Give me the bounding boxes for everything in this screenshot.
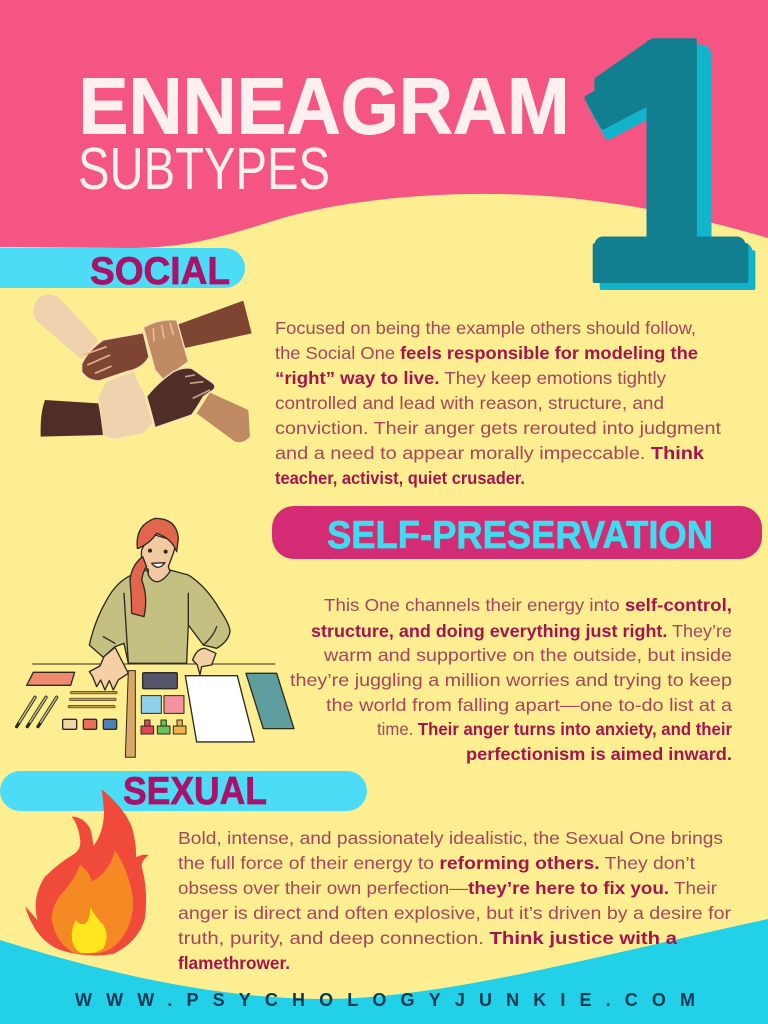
text block: social: “right” way to live. They keep emotions tightly — [275, 368, 666, 388]
cyan footer wave — [0, 919, 768, 1024]
text block: social: the Social One feels responsible for modeling the — [275, 343, 698, 363]
table edge — [33, 662, 275, 665]
text block: social — [275, 318, 721, 488]
pink header wave — [0, 0, 768, 248]
big number one — [574, 0, 763, 362]
dark block — [143, 673, 177, 689]
text block: self-preservation: warm and supportive on the outside, but inside — [323, 645, 732, 665]
text block: social: controlled and lead with reason, structure, and — [275, 393, 664, 413]
text block: sexual: anger is direct and often explosive, but it’s driven by a desire for — [178, 903, 731, 923]
text block: self-preservation: they’re juggling a million worries and trying to keep — [290, 670, 732, 690]
heading: sexual: SEXUAL — [123, 770, 267, 813]
text block: self-preservation: This One channels their energy into self-control, — [324, 595, 732, 615]
footer url: WWW.PSYCHOLOGYJUNKIE.COM — [75, 990, 695, 1010]
orange notebook — [27, 672, 75, 685]
small erasers — [63, 719, 77, 729]
icon: joined hands — [33, 295, 252, 442]
text block: self-preservation: time. Their anger turns into anxiety, and their — [377, 719, 732, 739]
paper — [185, 676, 254, 742]
text block: sexual: truth, purity, and deep connection. Think justice with a — [178, 928, 677, 948]
panel: social heading pill — [0, 248, 245, 293]
heading: self-preservation: SELF-PRESERVATION — [327, 514, 713, 557]
text block: sexual: obsess over their own perfection— they’re here to fix you. Their — [178, 878, 717, 898]
ruler — [125, 671, 135, 757]
text block: social: and a need to appear morally impeccable. Think — [275, 443, 704, 463]
face and neck — [141, 533, 177, 582]
text block: social: conviction. Their anger gets rerouted into judgment — [275, 418, 721, 438]
panel: self-preservation heading pill — [272, 506, 762, 559]
text block: sexual — [178, 828, 731, 973]
heading: social: SOCIAL — [90, 250, 230, 293]
teal folder — [246, 673, 294, 729]
text block: self-preservation: perfectionism is aimed inward. — [466, 744, 732, 764]
pens — [17, 697, 57, 727]
hair — [137, 518, 178, 552]
sticky notes — [141, 696, 161, 713]
title: Enneagram: ENNEAGRAM — [78, 62, 570, 150]
title — [78, 62, 570, 202]
pencils — [69, 693, 116, 707]
text block: social: teacher, activist, quiet crusader. — [275, 468, 525, 488]
binder clips — [141, 720, 154, 734]
icon: flame — [25, 789, 149, 955]
text block: sexual: the full force of their energy to reforming others. They don’t — [178, 853, 695, 873]
text block: self-preservation: the world from falling apart—one to-do list at a — [326, 695, 732, 715]
text block: sexual: flamethrower. — [178, 953, 290, 973]
text block: self-preservation — [290, 595, 732, 764]
text block: self-preservation: structure, and doing everything just right. They’re — [311, 621, 732, 641]
panel: sexual heading pill — [0, 770, 367, 813]
hands — [89, 647, 128, 690]
sweater — [89, 570, 230, 663]
text block: social: Focused on being the example others should follow, — [275, 318, 696, 338]
illustration: woman organizing desk — [17, 518, 294, 757]
title: Subtypes: SUBTYPES — [78, 136, 330, 202]
text block: sexual: Bold, intense, and passionately idealistic, the Sexual One brings — [178, 828, 723, 848]
